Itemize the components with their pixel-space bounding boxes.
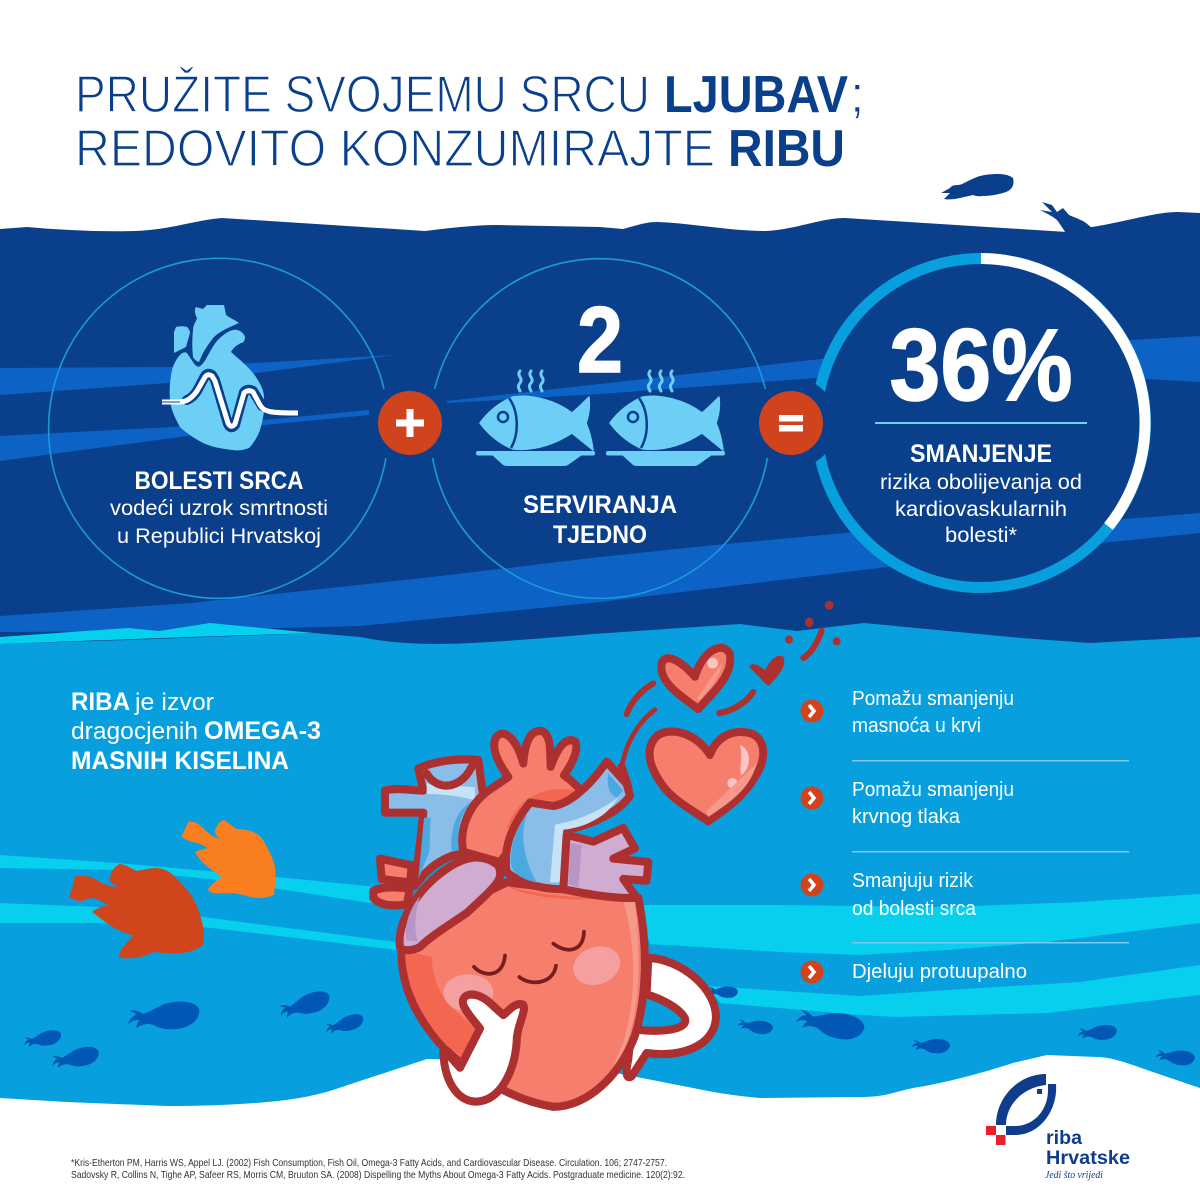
text: heart disease: u Republici Hrvatskoj: [117, 525, 321, 548]
item 2: krvnog tlaka: [852, 806, 961, 828]
cartoon heart character: [373, 601, 841, 1107]
heart body: [402, 882, 645, 1107]
tiny heart: [752, 658, 782, 684]
item 1: [800, 688, 1014, 737]
item 3: od bolesti srca: [852, 898, 977, 920]
item 1: masnoća u krvi: [852, 715, 981, 737]
item 4: Djeluju protuupalno: [852, 961, 1027, 983]
text: reduction: kardiovaskularnih: [895, 498, 1067, 521]
text: reduction: bolesti*: [945, 524, 1017, 547]
text: omega-3: RIBA: [71, 688, 130, 716]
left small vessels: [380, 859, 412, 882]
red fish: [69, 864, 204, 958]
icon: fish on plate 2: [606, 371, 725, 466]
item 2: Pomažu smanjenju: [852, 779, 1014, 801]
text: omega-3: [71, 688, 321, 775]
dashes: [622, 631, 822, 767]
icon: heart with pulse: [162, 305, 298, 450]
sea water: [0, 623, 1200, 1106]
left atrium: [400, 857, 500, 950]
text: reduction: [880, 440, 1082, 547]
circle: two servings: [433, 259, 767, 598]
title: RIBU: [728, 120, 845, 178]
number 36%: 36%: [890, 308, 1072, 422]
cyan sliver at water surface: [0, 623, 314, 644]
text: heart disease: BOLESTI SRCA: [134, 467, 304, 495]
upper light streaks: [0, 336, 1200, 632]
title: LJUBAV: [664, 66, 848, 124]
orange fish: [181, 820, 275, 898]
dark blue sea band: [0, 212, 1200, 660]
references: [71, 1157, 685, 1181]
cyan water streaks: [0, 855, 1200, 1017]
text: reduction: SMANJENJE: [910, 440, 1052, 468]
cheeks: [568, 940, 625, 991]
text: servings: SERVIRANJA: [523, 491, 677, 519]
right atrium: [563, 828, 648, 898]
dots: [785, 601, 841, 645]
small dark blue fish school: [23, 985, 1196, 1071]
text: heart disease: [110, 467, 328, 548]
circle: 36 percent: [816, 258, 1146, 588]
references: *Kris-Etherton PM, Harris WS, Appel LJ. (2002) Fish Consumption, Fish Oil, Omega-3 Fatty Acids, and Cardiovascular Disease. Circulation. 106; 2747-2757.: [71, 1157, 667, 1169]
text: omega-3: dragocjenih: [71, 718, 198, 745]
references: Sadovsky R, Collins N, Tighe AP, Safeer RS, Morris CM, Bruuton SA. (2008) Dispelling the Myths About Omega-3 Fatty Acids. Postgraduate medicine. 120(2):92.: [71, 1169, 685, 1181]
number 2: 2: [577, 287, 623, 392]
fish jumping above the waves: [941, 174, 1092, 240]
right arm: [618, 958, 716, 1077]
vena cava: [385, 759, 483, 886]
title: ;: [850, 66, 864, 124]
logo: riba Hrvatske: [986, 1074, 1130, 1181]
text: heart disease: vodeći uzrok smrtnosti: [110, 497, 328, 520]
big floating heart: [650, 732, 763, 821]
logo: riba Hrvatske: Hrvatske: [1046, 1148, 1130, 1169]
text: servings: [523, 491, 677, 549]
title: PRUŽITE SVOJEMU SRCU: [75, 66, 650, 124]
pulmonary artery: [506, 762, 630, 889]
logo: riba Hrvatske: riba: [1046, 1128, 1082, 1149]
item 2: [800, 779, 1014, 828]
aortic arch: [462, 731, 590, 862]
text: omega-3: MASNIH KISELINA: [71, 747, 289, 775]
small floating heart: [661, 648, 730, 709]
item 3: Smanjuju rizik: [852, 870, 974, 892]
text: omega-3: je izvor: [134, 689, 214, 716]
text: servings: TJEDNO: [553, 521, 647, 549]
item 3: [800, 870, 977, 920]
equals badge: [759, 391, 823, 455]
plus badge: [378, 391, 442, 455]
text: reduction: rizika obolijevanja od: [880, 471, 1082, 494]
item 1: Pomažu smanjenju: [852, 688, 1014, 710]
circle: heart disease: [49, 258, 386, 598]
logo: riba Hrvatske: Jedi što vrijedi: [1045, 1169, 1103, 1181]
title: [75, 66, 864, 178]
left hand: [443, 995, 524, 1102]
icon: fish on plate 1: [476, 371, 595, 466]
face: [474, 932, 584, 982]
title: REDOVITO KONZUMIRAJTE: [75, 120, 715, 178]
benefits list: [800, 688, 1129, 984]
text: omega-3: OMEGA-3: [204, 717, 321, 745]
